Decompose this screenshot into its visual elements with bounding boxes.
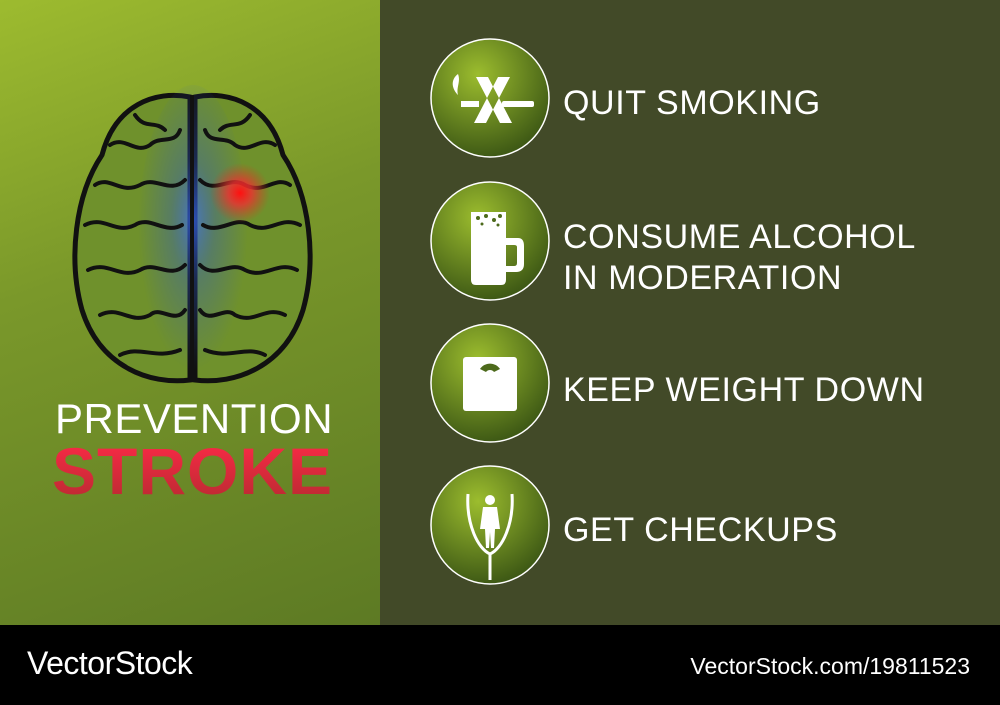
footer logo: VectorStock xyxy=(27,645,192,681)
brain illustration xyxy=(72,85,313,384)
item: quit smoking xyxy=(430,38,821,158)
item: weight xyxy=(430,323,925,443)
icon: stethoscope with body xyxy=(430,465,550,585)
icon: beer mug xyxy=(430,181,550,301)
icon: scale xyxy=(430,323,550,443)
footer url: VectorStock.com/19811523 xyxy=(690,653,970,679)
footer xyxy=(0,625,1000,705)
title: STROKE: STROKE xyxy=(52,434,333,508)
label: CONSUME ALCOHOL xyxy=(563,218,916,256)
panel: right dark xyxy=(380,0,1000,625)
title: PREVENTION: PREVENTION xyxy=(55,395,333,442)
label: KEEP WEIGHT DOWN xyxy=(563,371,925,409)
item: alcohol xyxy=(430,181,916,301)
label: GET CHECKUPS xyxy=(563,511,838,549)
label: QUIT SMOKING xyxy=(563,84,821,122)
icon: no smoking xyxy=(430,38,550,158)
label xyxy=(563,218,916,297)
item: checkups xyxy=(430,465,838,585)
panel: left green xyxy=(0,0,380,625)
label: IN MODERATION xyxy=(563,259,842,297)
